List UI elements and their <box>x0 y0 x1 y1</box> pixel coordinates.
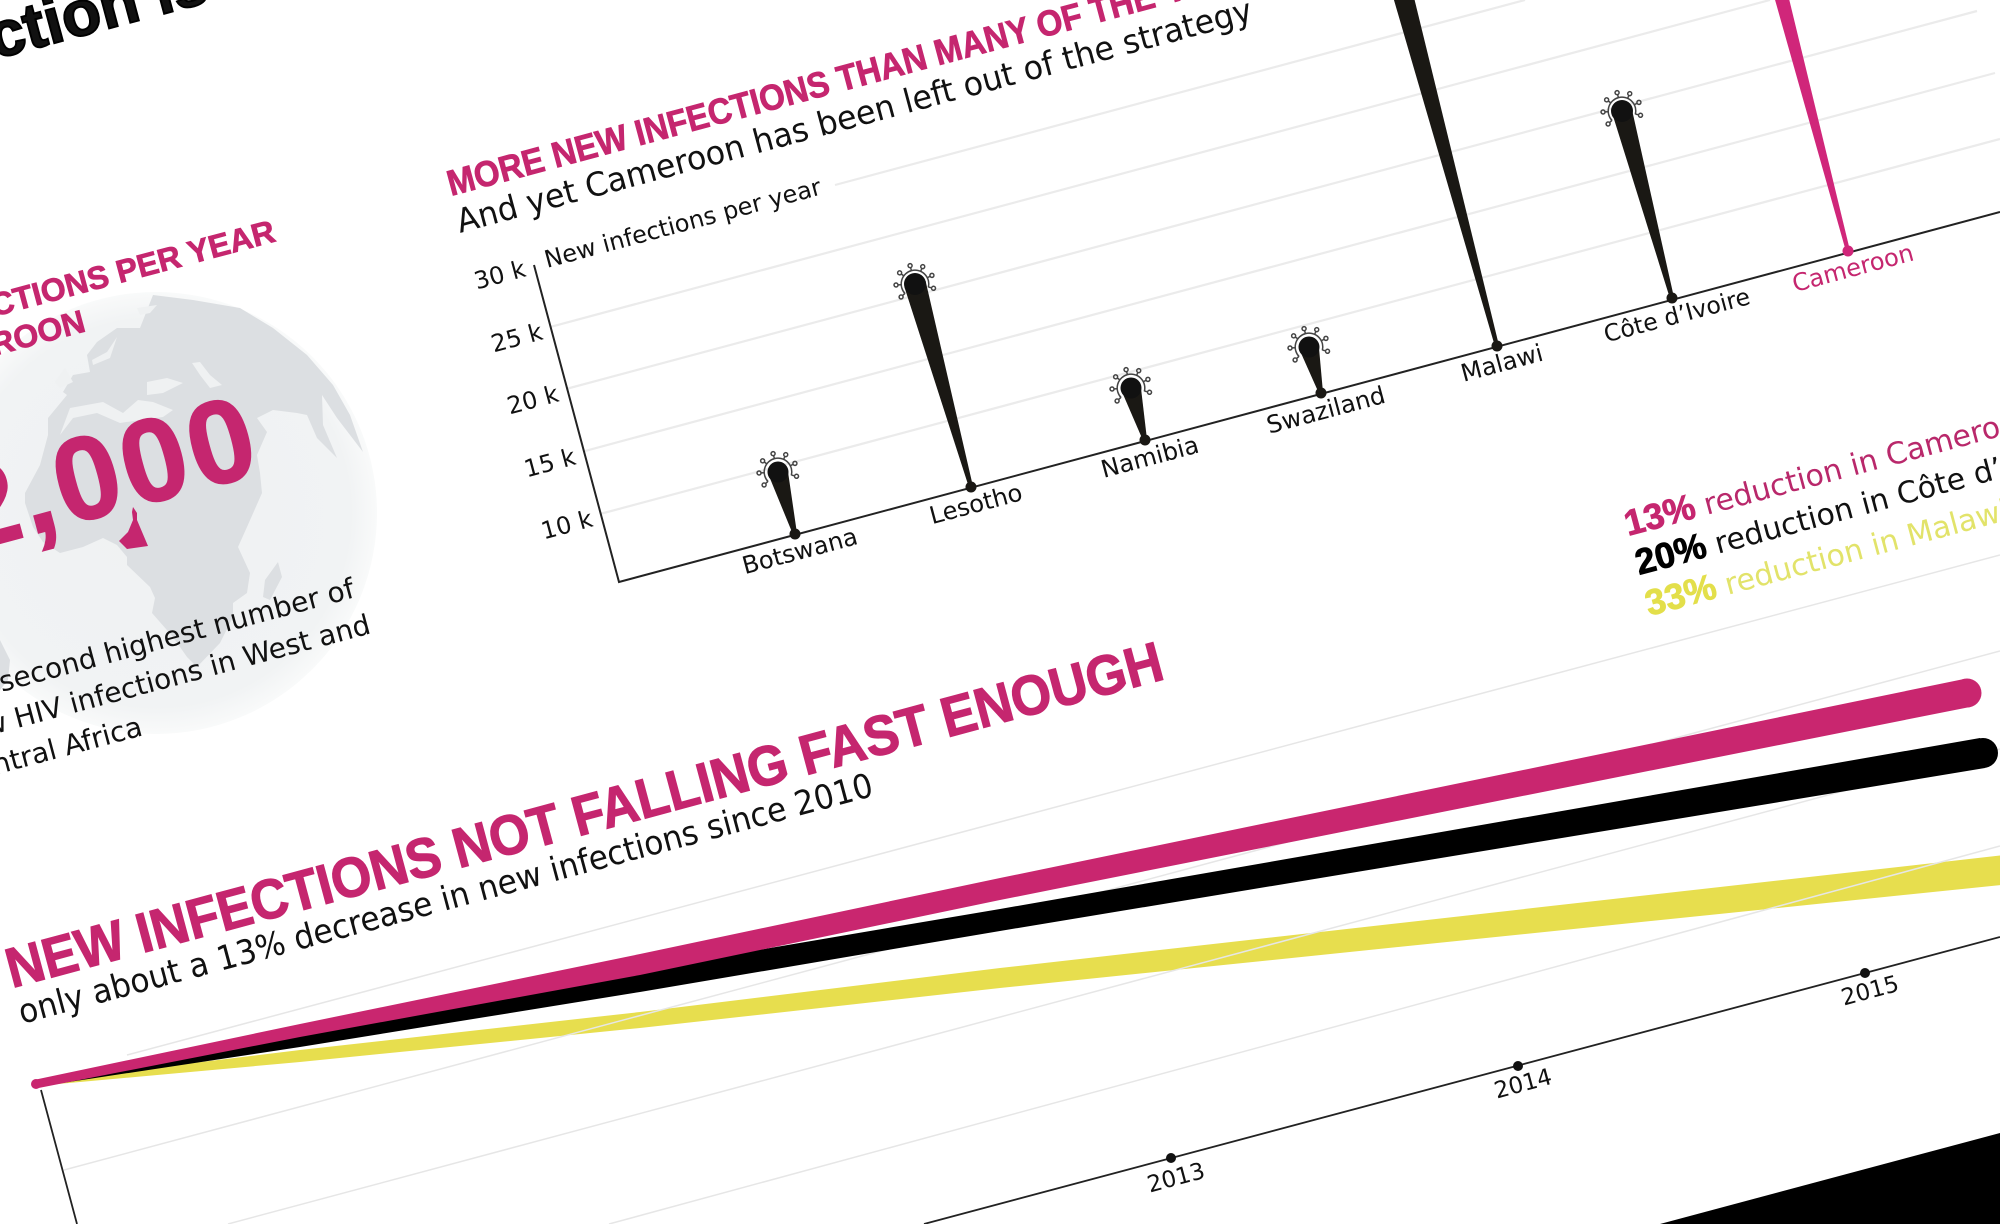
globe background <box>0 292 377 734</box>
x axis tick: 2015: 2015 <box>1839 971 1902 1011</box>
lollipop: Botswana <box>739 446 861 580</box>
line: Malawi 33 percent <box>36 851 2000 1086</box>
legend <box>1619 394 2000 624</box>
lollipop: Namibia: Namibia <box>1098 431 1202 484</box>
lollipop: Lesotho: Lesotho <box>926 478 1025 530</box>
panel: lollipop chart of new infections by country <box>442 0 2000 582</box>
heading <box>442 0 1572 204</box>
lollipop: Cote d'Ivoire <box>1596 85 1753 348</box>
lollipop: Malawi <box>1389 0 1546 388</box>
lollipop: Malawi: Malawi <box>1458 339 1546 388</box>
world land masses <box>0 295 363 690</box>
line: Cote d'Ivoire 20 percent <box>36 738 1998 1087</box>
lollipop: Cameroon <box>1770 0 1917 298</box>
lollipop: Swaziland: Swaziland <box>1264 381 1388 440</box>
lollipop: Botswana: Botswana <box>739 522 861 580</box>
x axis tick: 2013: 2013 <box>1145 1158 1208 1198</box>
chart axes <box>534 212 2000 582</box>
y axis label: New infections per year <box>541 173 824 274</box>
black footer band <box>1660 1133 2000 1224</box>
lollipop: Swaziland <box>1264 321 1388 440</box>
y axis tick labels <box>471 255 596 545</box>
heading: NEW INFECTIONS NOT FALLING FAST ENOUGH <box>0 629 1169 1000</box>
lollipop: Lesotho <box>889 258 1025 530</box>
y axis tick labels: 20 k <box>504 380 562 420</box>
subheading: only about a 13% decrease in new infections since 2010 <box>14 766 877 1032</box>
lollipop: Cote d'Ivoire: Côte d’Ivoire <box>1601 282 1753 348</box>
y axis tick labels: 15 k <box>521 443 579 483</box>
x axis tick: 2014: 2014 <box>1492 1064 1555 1104</box>
axes <box>41 937 2000 1224</box>
text block: globe caption <box>0 572 374 791</box>
line: Cameroon 13 percent <box>31 678 1982 1089</box>
lollipop: Namibia <box>1098 362 1202 484</box>
icon: Cameroon map <box>119 507 148 549</box>
y axis tick labels: 10 k <box>538 505 596 545</box>
y axis tick labels: 25 k <box>488 318 546 358</box>
lollipop: Cameroon: Cameroon <box>1789 239 1917 298</box>
panel: globe with new infections figure <box>0 213 377 791</box>
y axis tick labels: 30 k <box>471 255 529 295</box>
panel: line chart of falling infections <box>0 394 2000 1224</box>
